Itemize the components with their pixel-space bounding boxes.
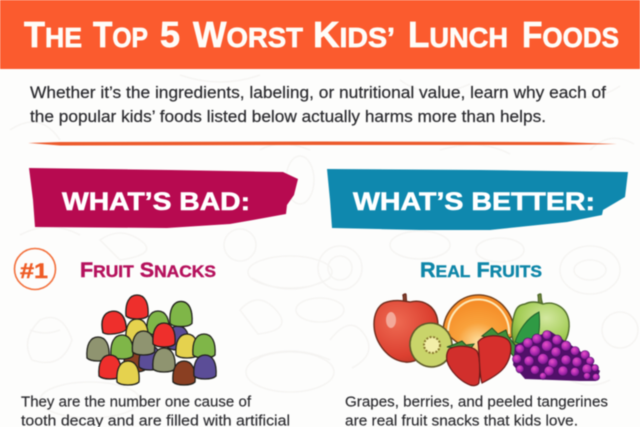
body text: real fruits bbox=[345, 394, 608, 427]
background food doodles bbox=[10, 75, 638, 418]
title: KIDS’ bbox=[313, 14, 395, 55]
body text: real fruits: Grapes, berries, and peeled tangerines bbox=[345, 394, 608, 410]
illustration: fruits bbox=[374, 294, 600, 386]
kiwi core bbox=[424, 337, 440, 353]
green apple bbox=[512, 294, 569, 348]
banner: what's better bbox=[327, 169, 628, 230]
apple highlight bbox=[386, 312, 396, 328]
illustration: gumdrops bbox=[87, 295, 216, 385]
leaf bbox=[515, 312, 540, 345]
number badge #1: #1 bbox=[20, 260, 48, 283]
orange divider bbox=[28, 142, 617, 146]
apple bbox=[374, 294, 438, 362]
title bbox=[24, 14, 619, 55]
strawberry left bbox=[447, 341, 474, 350]
title: 5 bbox=[160, 14, 180, 55]
body text: fruit snacks bbox=[21, 394, 290, 427]
intro text bbox=[30, 84, 606, 126]
title: TOP bbox=[93, 14, 148, 55]
number badge #1 bbox=[14, 248, 56, 290]
heading: fruit snacks: FRUIT SNACKS bbox=[80, 259, 216, 282]
title: LUNCH bbox=[408, 14, 508, 55]
banner: what's better: WHAT’S BETTER: bbox=[353, 188, 595, 216]
heading: real fruits: REAL FRUITS bbox=[420, 259, 542, 282]
banner: what's bad: WHAT’S BAD: bbox=[62, 188, 250, 216]
title: WORST bbox=[193, 14, 303, 55]
banner: what's bad bbox=[29, 168, 298, 228]
orange bbox=[443, 295, 514, 360]
intro text: the popular kids’ foods listed below actually harms more than helps. bbox=[30, 108, 546, 126]
strawberry right bbox=[482, 328, 522, 358]
header bar bbox=[0, 0, 640, 69]
intro text: Whether it’s the ingredients, labeling, or nutritional value, learn why each of bbox=[30, 84, 606, 102]
body text: fruit snacks: They are the number one cause of bbox=[21, 394, 252, 410]
title: THE bbox=[24, 14, 82, 55]
grapes bbox=[512, 330, 600, 381]
title: FOODS bbox=[522, 14, 619, 55]
kiwi bbox=[405, 318, 457, 372]
orange rind bbox=[448, 299, 509, 334]
